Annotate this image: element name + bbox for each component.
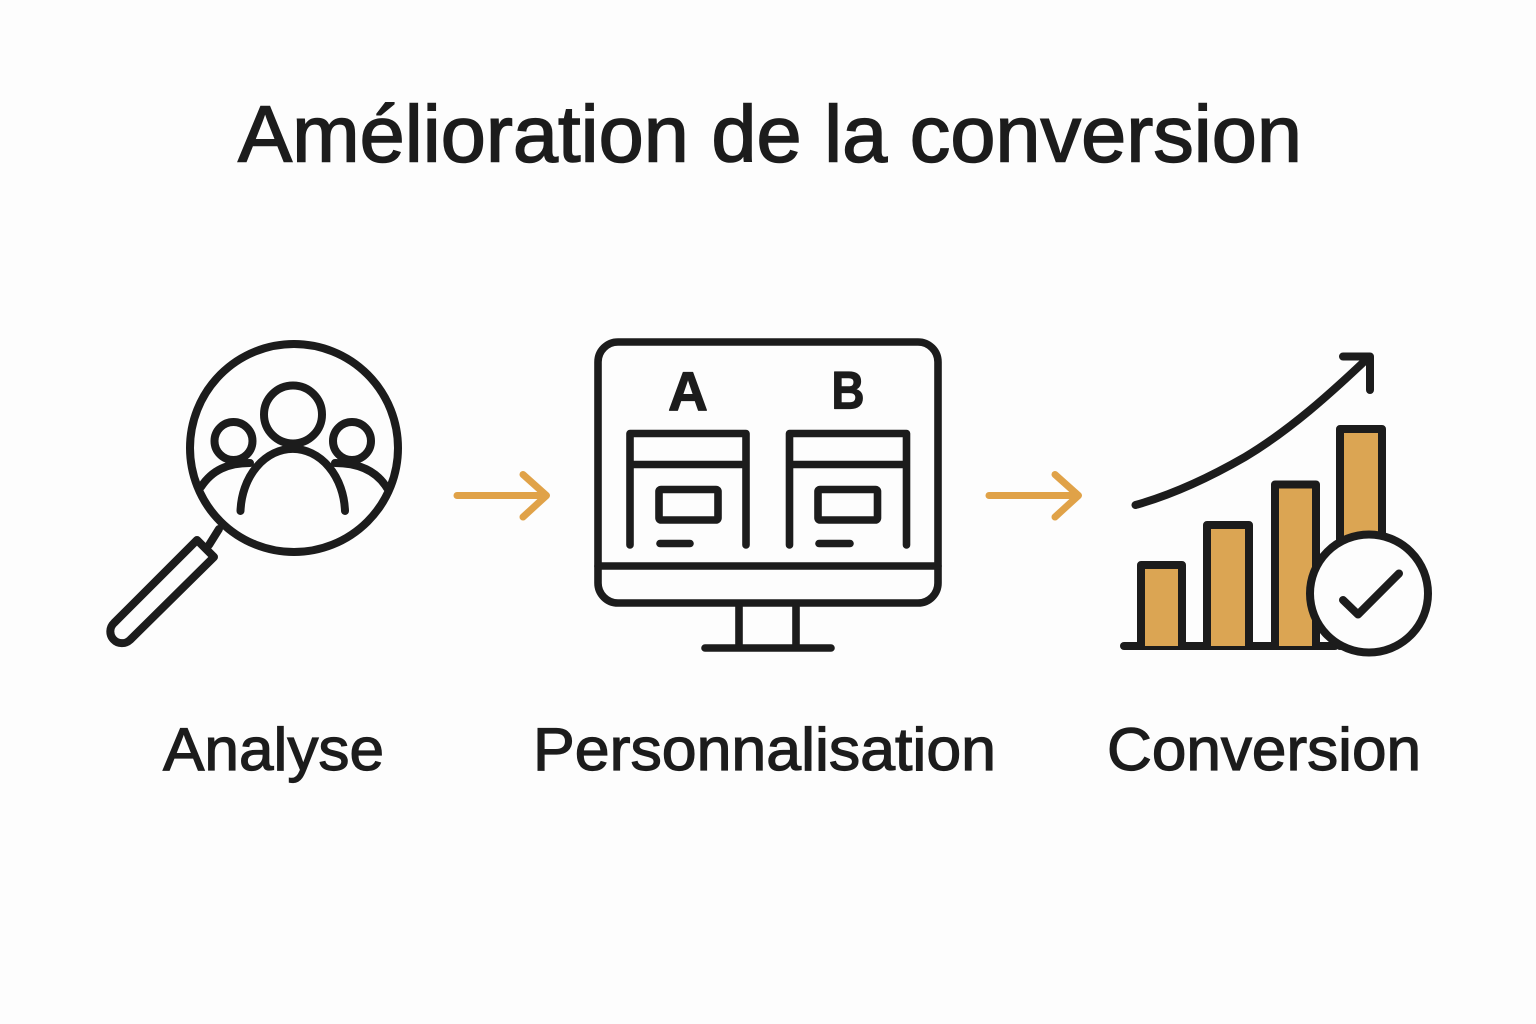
icon: rising bar chart with check xyxy=(1124,356,1428,652)
bars xyxy=(1141,429,1382,646)
variant B: B xyxy=(832,362,864,420)
check badge xyxy=(1310,534,1428,652)
growth arrow xyxy=(1136,356,1370,505)
icon: monitor with A/B test xyxy=(598,342,938,648)
label: Analyse: Analyse xyxy=(163,716,384,783)
label: Personnalisation: Personnalisation xyxy=(533,716,996,783)
title: Amélioration de la conversion xyxy=(238,90,1302,178)
icon: magnifying glass over audience xyxy=(110,344,398,643)
variant B xyxy=(790,362,906,545)
variant A xyxy=(630,360,746,545)
label: Conversion: Conversion xyxy=(1107,716,1421,783)
variant A: A xyxy=(668,360,708,422)
arrow: personnalisation to conversion xyxy=(989,474,1078,517)
arrow: analyse to personnalisation xyxy=(457,474,546,517)
